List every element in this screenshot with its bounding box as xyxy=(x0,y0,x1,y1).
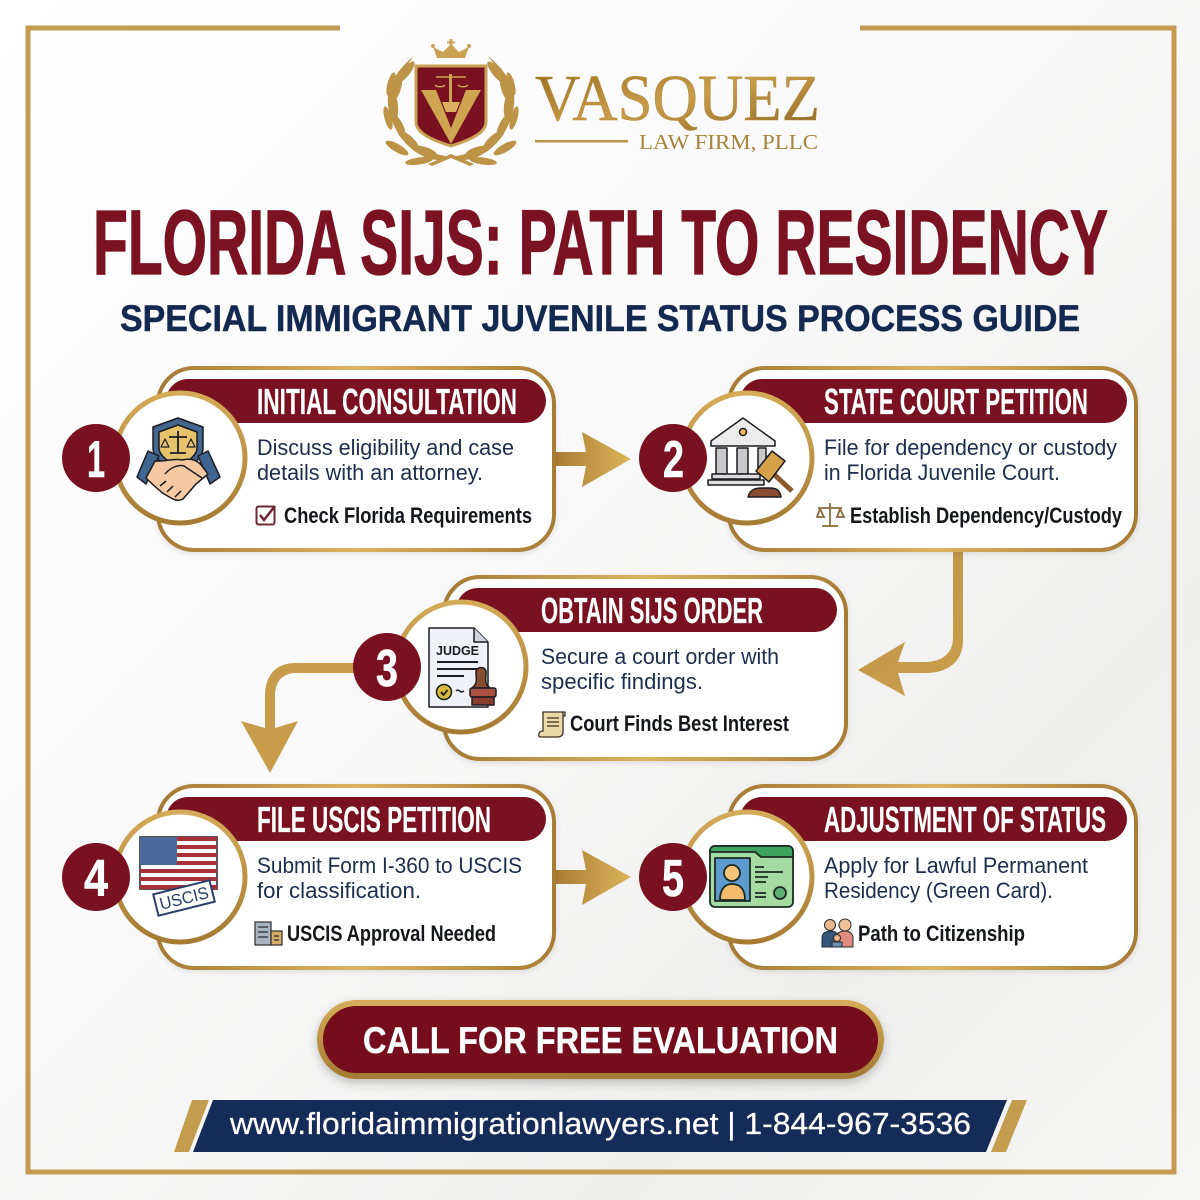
number badge xyxy=(639,843,707,911)
card outline xyxy=(729,368,1136,550)
icon: laurel wreath xyxy=(382,56,520,166)
description: Secure a court order with xyxy=(541,644,779,669)
icon: judge document and stamp: JUDGE xyxy=(436,643,479,658)
heading band xyxy=(166,797,546,841)
icon circle xyxy=(115,812,245,942)
icon circle xyxy=(396,602,526,732)
banner stripes xyxy=(174,1100,1027,1152)
heading band xyxy=(740,379,1127,423)
icon: US flag xyxy=(140,837,217,889)
panel: step 2 xyxy=(639,368,1136,550)
tag: Establish Dependency/Custody xyxy=(850,503,1123,528)
step number: 4 xyxy=(84,850,108,908)
number badge xyxy=(62,843,130,911)
card outline xyxy=(158,368,554,550)
icon circle xyxy=(115,393,245,523)
panel: step 1 xyxy=(62,368,554,550)
heading: INITIAL CONSULTATION xyxy=(257,381,517,422)
description: for classification. xyxy=(257,878,421,903)
panel: step 4 xyxy=(62,786,554,968)
call to action button xyxy=(320,1003,881,1076)
number badge xyxy=(353,633,421,701)
tag: Check Florida Requirements xyxy=(284,503,532,528)
icon: checkbox xyxy=(256,506,275,524)
icon circle xyxy=(682,393,812,523)
icon: building xyxy=(255,922,282,945)
arrow: step 1 to step 2 xyxy=(555,432,631,487)
card outline xyxy=(444,577,846,759)
icon circle xyxy=(682,812,812,942)
call to action label: CALL FOR FREE EVALUATION xyxy=(363,1020,838,1061)
tag: Court Finds Best Interest xyxy=(570,711,790,736)
number badge xyxy=(639,424,707,492)
heading band xyxy=(740,797,1127,841)
arrow: step 4 to step 5 xyxy=(555,850,631,905)
logo xyxy=(382,39,820,166)
step number: 1 xyxy=(87,431,105,489)
step number: 3 xyxy=(376,640,398,698)
logo subline: LAW FIRM, PLLC xyxy=(639,130,818,154)
description: Apply for Lawful Permanent xyxy=(824,853,1088,878)
description: details with an attorney. xyxy=(257,460,483,485)
icon: family xyxy=(822,919,853,947)
panel: step 5 xyxy=(639,786,1136,968)
icon: crown xyxy=(431,39,471,58)
step number: 2 xyxy=(663,431,684,489)
tag: USCIS Approval Needed xyxy=(287,921,496,946)
description: File for dependency or custody xyxy=(824,435,1117,460)
icon: small scales xyxy=(817,503,844,526)
description: specific findings. xyxy=(541,669,703,694)
description: Discuss eligibility and case xyxy=(257,435,514,460)
icon: green card xyxy=(710,846,793,907)
arrow: step 3 to step 4 xyxy=(241,663,358,773)
heading band xyxy=(456,588,837,632)
heading: FILE USCIS PETITION xyxy=(257,799,491,840)
icon: judge document and stamp xyxy=(429,628,496,707)
subtitle: SPECIAL IMMIGRANT JUVENILE STATUS PROCESS GUIDE xyxy=(120,298,1080,339)
heading: OBTAIN SIJS ORDER xyxy=(541,590,763,631)
icon: USCIS stamp: USCIS xyxy=(158,883,211,914)
description: Submit Form I-360 to USCIS xyxy=(257,853,522,878)
icon: shield xyxy=(416,66,486,146)
panel: step 3 xyxy=(353,577,846,759)
icon: scroll xyxy=(539,712,565,737)
card outline xyxy=(158,786,554,968)
icon: shield and handshake xyxy=(137,418,220,500)
arrow: step 2 to step 3 xyxy=(858,552,963,696)
contact text: www.floridaimmigrationlawyers.net | 1-844-967-3536 xyxy=(229,1106,971,1141)
heading band xyxy=(166,379,546,423)
step number: 5 xyxy=(662,850,684,908)
description: Residency (Green Card). xyxy=(824,878,1053,903)
description: in Florida Juvenile Court. xyxy=(824,460,1060,485)
number badge xyxy=(62,424,130,492)
tag: Path to Citizenship xyxy=(858,921,1025,946)
icon: courthouse and gavel xyxy=(708,418,792,497)
contact banner xyxy=(174,1100,1027,1152)
card outline xyxy=(729,786,1136,968)
logo wordmark: VASQUEZ xyxy=(535,62,820,135)
